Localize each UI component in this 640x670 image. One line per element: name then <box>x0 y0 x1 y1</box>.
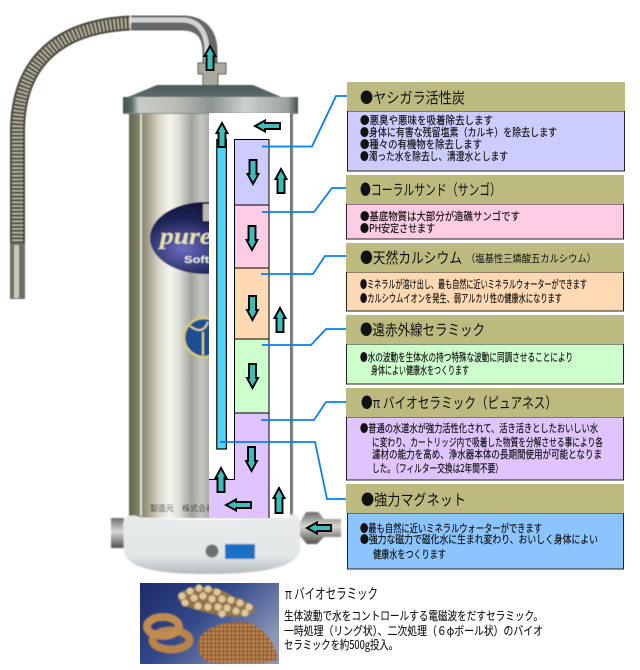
spout coupling <box>198 63 226 90</box>
filter: far infrared ceramic <box>234 339 269 413</box>
panel: pi bio ceramic: した。（フィルター交換は2年間不要） <box>372 460 503 476</box>
right fitting <box>300 512 341 544</box>
caption: bio ceramic: π バイオセラミック <box>285 583 378 604</box>
filter: coconut carbon <box>234 140 269 205</box>
panel: far infrared ceramic: 身体によい健康水をつくります <box>371 362 469 378</box>
panel: coconut shell activated carbon: ●濁った水を除去し、清澄水とします <box>360 148 508 164</box>
panel: coral sand: ●基底物質は大部分が造礁サンゴです <box>360 208 520 224</box>
panel: coconut shell activated carbon: ●種々の有機物を除去します <box>360 136 482 152</box>
caption: bio ceramic: 生体波動で水をコントロールする電磁波をだすセラミック。 <box>284 607 543 624</box>
panel: pi bio ceramic <box>346 388 624 480</box>
filter: coral sand <box>234 205 269 268</box>
purifier body: Soft <box>184 254 210 266</box>
cutaway <box>209 113 290 518</box>
panel: coral sand: ●コーラルサンド（サンゴ） <box>360 179 501 200</box>
base <box>111 512 341 574</box>
indicator dot <box>206 544 218 558</box>
flexible spout hose <box>10 20 226 299</box>
round emblem <box>184 318 224 357</box>
panel: strong magnet: ●強力マグネット <box>361 489 466 510</box>
caption: bio ceramic: セラミックを約500g投入。 <box>284 636 398 653</box>
panel: coconut shell activated carbon: ●悪臭や悪味を吸着除去します <box>360 112 493 128</box>
filter: bio ceramic <box>209 413 269 518</box>
flow arrows <box>204 46 331 534</box>
maker label: 製造元 株式会社 <box>150 503 214 514</box>
panel: strong magnet <box>346 484 624 569</box>
caption: bio ceramic <box>284 583 543 653</box>
panel: coconut shell activated carbon: ●ヤシガラ活性炭 <box>360 87 465 108</box>
logo oval <box>150 202 260 274</box>
panel: coconut shell activated carbon <box>347 82 625 171</box>
lid <box>123 85 298 114</box>
purifier body <box>123 85 298 518</box>
logo text: pure <box>158 224 212 250</box>
panel: natural calcium <box>346 243 624 311</box>
central tube <box>217 140 226 449</box>
blue label <box>225 544 255 559</box>
panel: far infrared ceramic: ●遠赤外線セラミック <box>360 319 485 340</box>
hose end sleeve <box>10 243 25 299</box>
left fitting <box>111 518 124 548</box>
smooth spout pipe <box>131 23 210 66</box>
panel: natural calcium: （塩基性三燐酸五カルシウム） <box>466 251 596 266</box>
leader lines <box>220 96 347 499</box>
caption: bio ceramic: 一時処理（リング状）、二次処理（６φボール状）のバイオ <box>284 622 543 639</box>
panel: coral sand <box>346 175 624 239</box>
panel: pi bio ceramic: ●π バイオセラミック（ピュアネス） <box>361 392 557 413</box>
panel: strong magnet: 健康水をつくります <box>373 546 446 562</box>
panel: coral sand: ●PH安定させます <box>360 220 435 236</box>
panel: coconut shell activated carbon: ●身体に有害な残留塩素（カルキ）を除去します <box>360 124 557 140</box>
panel: strong magnet: ●最も自然に近いミネラルウォーターができます <box>360 520 542 536</box>
photo: bio ceramic balls and rings <box>140 583 279 664</box>
filter: calcium <box>234 268 269 339</box>
panel: natural calcium: ●天然カルシウム <box>360 247 462 268</box>
panel: far infrared ceramic <box>346 315 624 384</box>
